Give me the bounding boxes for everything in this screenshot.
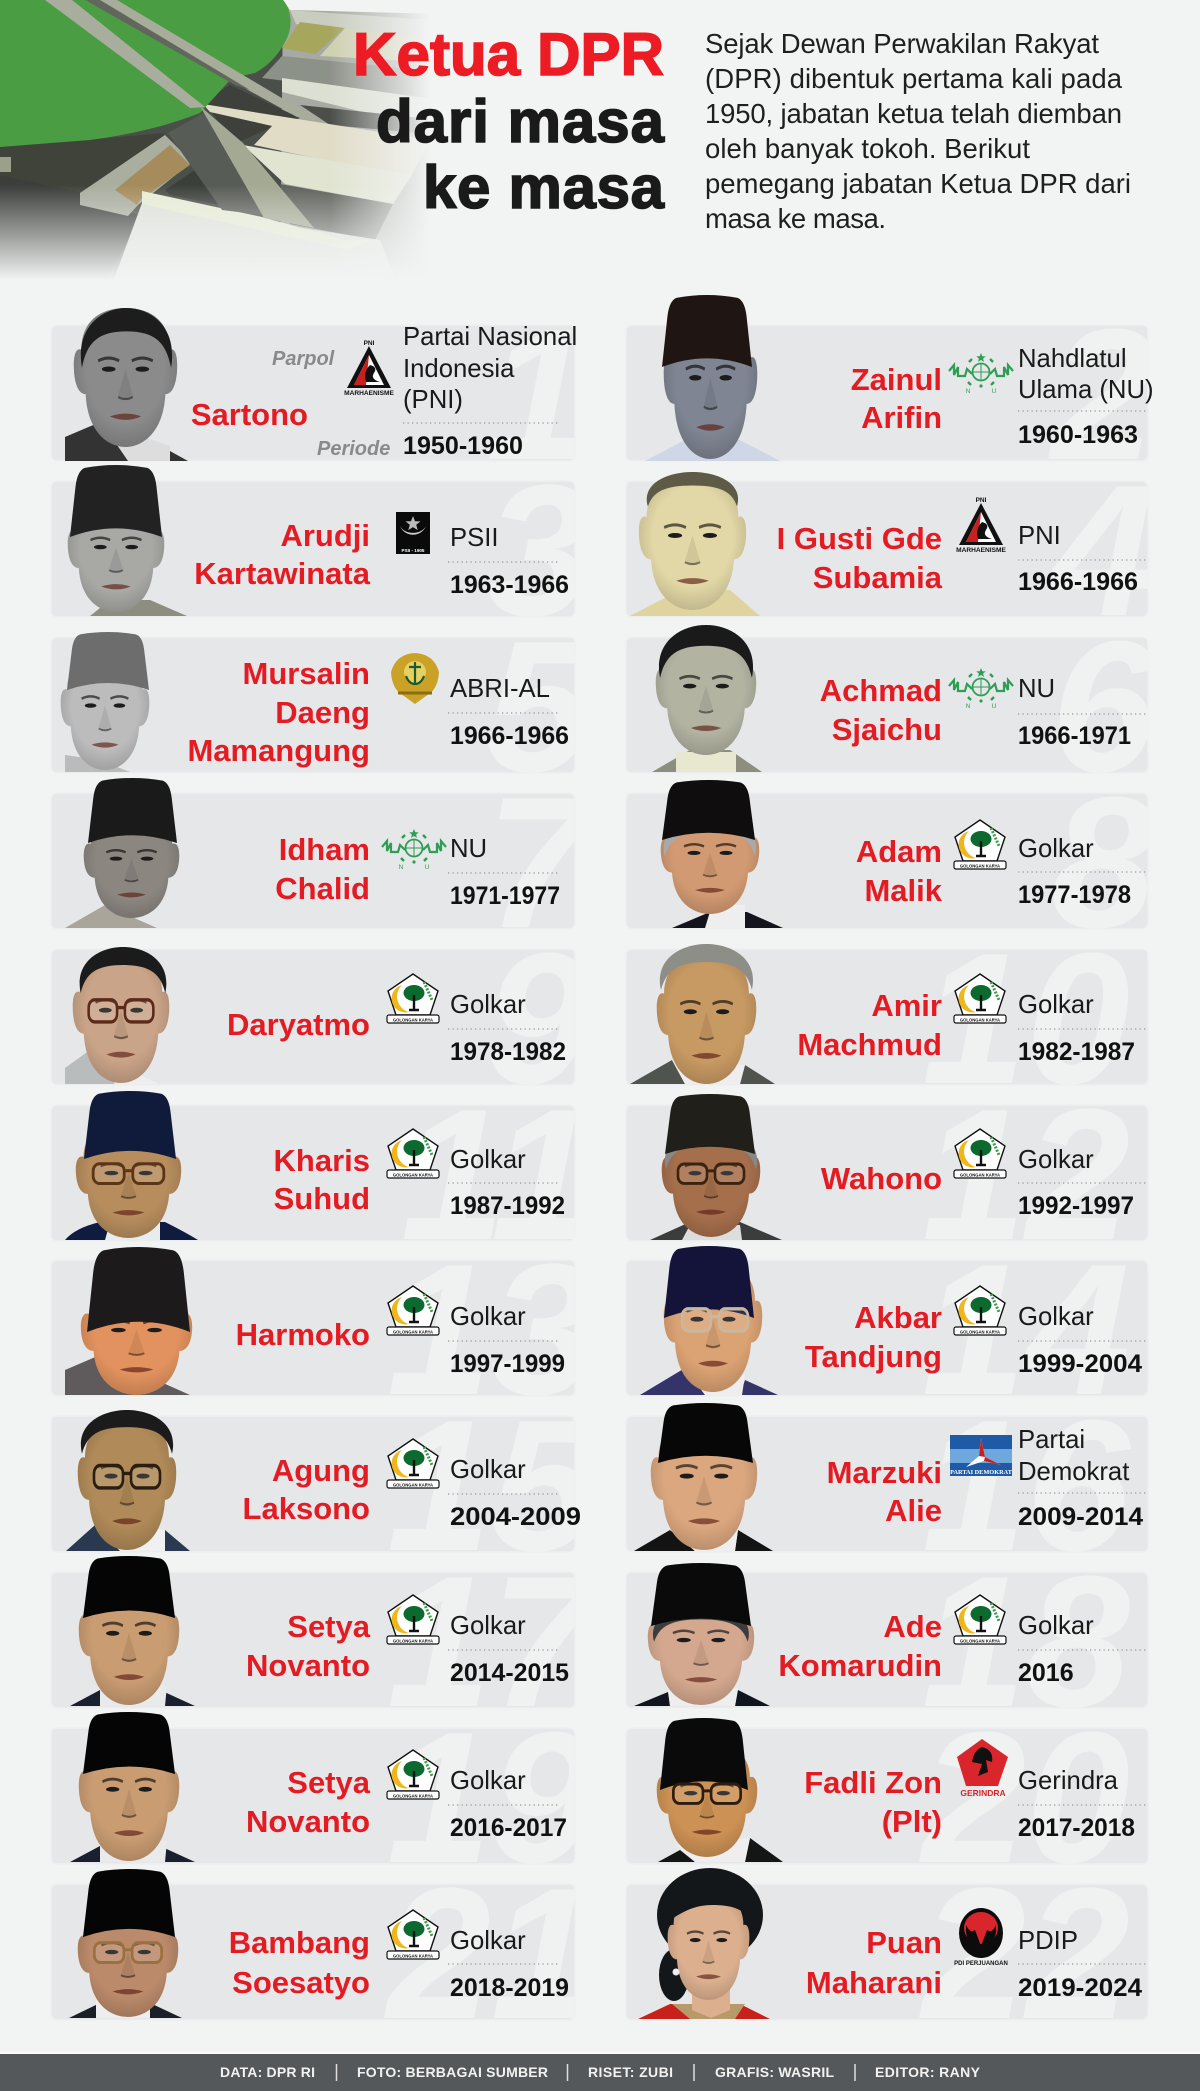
name: Arudji Kartawinata: Kartawinata: [194, 556, 371, 591]
party: Partai Nasional Indonesia: Partai Nasional: [403, 323, 577, 351]
party: Golkar: Golkar: [450, 991, 526, 1019]
party: Gerindra: Gerindra: [1018, 1767, 1119, 1795]
panel: 14 Akbar Tandjung: [626, 1225, 1148, 1434]
footer credits bar: DATA: DPR RI: [220, 2064, 315, 2080]
name: Amir Machmud: [797, 988, 942, 1062]
panel: 21 Bambang Soesatyo: [51, 1849, 595, 2058]
logo: Golkar: [954, 1129, 1006, 1178]
name: Agung Laksono: [243, 1453, 370, 1526]
panel: 11 Kharis Suhud: 11: [401, 1070, 595, 1279]
panel: 13 Harmoko: [51, 1225, 595, 1434]
name: Puan Maharani: Maharani: [806, 1965, 942, 2000]
panel: 14 Akbar Tandjung: 14: [922, 1225, 1130, 1434]
name: Agung Laksono: Laksono: [243, 1491, 370, 1526]
party: Golkar: Golkar: [450, 1767, 526, 1795]
portrait: Setya Novanto: [70, 1712, 195, 1862]
party: Golkar: Golkar: [450, 1612, 526, 1640]
period: 1977-1978: [1018, 881, 1131, 909]
panel: 6 Achmad Sjaichu: 6: [1051, 602, 1156, 811]
logo: Golkar: [954, 974, 1006, 1023]
name: Bambang Soesatyo: Soesatyo: [232, 1965, 370, 2000]
party: NU: NU: [450, 835, 487, 863]
name: Setya Novanto: Novanto: [246, 1648, 370, 1683]
period: 1966-1966: [1018, 568, 1138, 596]
name: Fadli Zon (Plt): Fadli Zon: [804, 1765, 942, 1800]
panel: 18 Ade Komarudin: 18: [922, 1537, 1130, 1746]
panel: 5 Mursalin Daeng Mamangung: [51, 602, 593, 811]
name: Amir Machmud: Amir: [871, 988, 942, 1023]
logo: Golkar: [387, 974, 439, 1023]
party: Partai Demokrat: [1018, 1426, 1129, 1486]
name: Zainul Arifin: Zainul: [851, 362, 942, 397]
panel: 9 Daryatmo: [51, 914, 590, 1123]
party: Partai Nasional Indonesia: [403, 323, 577, 414]
label: Periode: Periode: [317, 438, 390, 460]
title: [353, 21, 665, 221]
logo: PDIP: [954, 1908, 1008, 1967]
logo: Golkar: [954, 1595, 1006, 1644]
panel: 1 Sartono: 1: [486, 290, 590, 499]
logo: Golkar: [387, 1129, 439, 1178]
period: 2016-2017: [450, 1814, 567, 1842]
name: Puan Maharani: Puan: [866, 1925, 942, 1960]
name: Idham Chalid: Idham: [279, 832, 370, 867]
panel: 3 Arudji Kartawinata: [51, 446, 590, 655]
portrait: Setya Novanto: [70, 1556, 195, 1706]
portrait: Mursalin Daeng Mamangung: [61, 632, 149, 772]
panel: 12 Wahono: 12: [922, 1070, 1130, 1279]
panel: 20 Fadli Zon: 20: [919, 1693, 1130, 1902]
party: Nahdlatul Ulama: Nahdlatul: [1018, 345, 1127, 373]
portrait: Daryatmo: [65, 947, 169, 1084]
period: 1950-1960: [403, 432, 523, 460]
name: Kharis Suhud: [274, 1143, 370, 1216]
logo: Demokrat: [950, 1435, 1013, 1476]
footer credits bar: RISET: ZUBI: [588, 2064, 673, 2080]
name: Achmad Sjaichu: [820, 673, 942, 747]
name: Marzuki Alie: [827, 1455, 942, 1528]
panel: 17 Setya Novanto: [51, 1537, 603, 1746]
period: 1966-1966: [450, 722, 569, 750]
name: Ade Komarudin: Ade: [883, 1609, 942, 1644]
name: Idham Chalid: Chalid: [275, 871, 370, 906]
name: Daryatmo: Daryatmo: [227, 1007, 370, 1042]
portrait: Puan Maharani: [638, 1868, 770, 2019]
panel: 21 Bambang Soesatyo: 21: [384, 1849, 595, 2058]
party: Partai Nasional Indonesia: (PNI): [403, 386, 463, 414]
period: 2004-2009: [450, 1503, 581, 1531]
portrait: Amir Machmud: [630, 944, 775, 1084]
period: 2014-2015: [450, 1659, 569, 1687]
portrait: Fadli Zon: [657, 1718, 783, 1862]
name: Setya Novanto: Setya: [287, 1609, 371, 1644]
panel: 9 Daryatmo: 9: [486, 914, 590, 1123]
portrait: Adam Malik: [661, 780, 783, 928]
name: Puan Maharani: [806, 1925, 942, 2000]
period: 1971-1977: [450, 882, 560, 910]
portrait: Marzuki Alie: [634, 1403, 773, 1551]
name: Fadli Zon (Plt): [804, 1765, 942, 1839]
panel: 19 Setya Novanto: 19: [387, 1693, 595, 1902]
party: Golkar: Golkar: [1018, 991, 1094, 1019]
footer credits bar: [0, 2052, 1200, 2091]
panel: 8 Adam Malik: [626, 758, 1155, 967]
name: Arudji Kartawinata: [194, 518, 371, 591]
panel: 4 I Gusti Gde Subamia: 4: [1047, 446, 1155, 655]
name: Wahono: Wahono: [821, 1161, 942, 1196]
panel: 15 Agung Laksono: [51, 1381, 598, 1590]
portrait: Agung Laksono: [66, 1410, 190, 1551]
party: Partai Demokrat: Demokrat: [1018, 1458, 1129, 1486]
name: Agung Laksono: Agung: [272, 1453, 370, 1488]
panel: 11 Kharis Suhud: [51, 1070, 595, 1279]
logo: PDIP: PDI PERJUANGAN: [954, 1961, 1008, 1967]
portrait: Ade Komarudin: [634, 1563, 770, 1706]
party: Nahdlatul Ulama: Ulama (NU): [1018, 376, 1154, 404]
party: Golkar: Golkar: [450, 1927, 526, 1955]
panel: 22 Puan Maharani: [626, 1849, 1148, 2058]
name: Setya Novanto: [246, 1765, 371, 1839]
name: Amir Machmud: Machmud: [797, 1027, 942, 1062]
period: 2016: [1018, 1659, 1074, 1687]
period: 1978-1982: [450, 1038, 566, 1066]
panel: 20 Fadli Zon: [626, 1693, 1148, 1902]
party: Golkar: Golkar: [1018, 1146, 1094, 1174]
panel: 22 Puan Maharani: 22: [919, 1849, 1130, 2058]
name: Kharis Suhud: Suhud: [274, 1181, 370, 1216]
panel: 3 Arudji Kartawinata: 3: [486, 446, 590, 655]
intro text: pemegang jabatan Ketua DPR dari: [705, 168, 1131, 199]
party: Golkar: Golkar: [450, 1303, 526, 1331]
period: 1963-1966: [450, 571, 569, 599]
logo: Golkar: [387, 1439, 439, 1488]
name: Setya Novanto: [246, 1609, 371, 1683]
name: Marzuki Alie: Marzuki: [827, 1455, 942, 1490]
name: Arudji Kartawinata: Arudji: [280, 518, 370, 553]
title: ke masa: [423, 154, 665, 221]
portrait: Sartono: [65, 308, 188, 461]
intro text: oleh banyak tokoh. Berikut: [705, 133, 1030, 164]
logo: PNI: [344, 340, 395, 397]
name: Harmoko: Harmoko: [236, 1317, 370, 1352]
logo: PSII: [396, 512, 430, 554]
logo: Gerindra: GERINDRA: [960, 1788, 1006, 1798]
logo: Golkar: [954, 820, 1006, 869]
name: Bambang Soesatyo: Bambang: [229, 1925, 370, 1960]
name: Marzuki Alie: Alie: [885, 1493, 942, 1528]
intro text: 1950, jabatan ketua telah diemban: [705, 98, 1122, 129]
logo: Golkar: [387, 1286, 439, 1335]
name: Adam Malik: Malik: [864, 873, 943, 908]
party: Partai Nasional Indonesia: Indonesia: [403, 355, 515, 383]
panel: 18 Ade Komarudin: [626, 1537, 1148, 1746]
panel: 16 Marzuki Alie: 16: [922, 1381, 1131, 1590]
title: dari masa: [376, 88, 665, 155]
period: 1966-1971: [1018, 722, 1131, 750]
period: 1987-1992: [450, 1192, 565, 1220]
intro text: Sejak Dewan Perwakilan Rakyat: [705, 28, 1099, 59]
panel: 15 Agung Laksono: 15: [387, 1381, 598, 1590]
period: 2019-2024: [1018, 1974, 1142, 2002]
logo: Demokrat: PARTAI DEMOKRAT: [950, 1469, 1013, 1476]
name: I Gusti Gde Subamia: Subamia: [813, 560, 943, 595]
period: 1992-1997: [1018, 1192, 1134, 1220]
portrait: Arudji Kartawinata: [68, 465, 187, 616]
panel: 19 Setya Novanto: [51, 1693, 595, 1902]
period: 1997-1999: [450, 1350, 565, 1378]
party: Golkar: Golkar: [450, 1146, 526, 1174]
logo: Golkar: [954, 1286, 1006, 1335]
name: Achmad Sjaichu: Sjaichu: [832, 712, 942, 747]
name: Sartono: Sartono: [191, 397, 308, 432]
logo: Golkar: [387, 1595, 439, 1644]
name: Kharis Suhud: Kharis: [274, 1143, 370, 1178]
logo: Golkar: [387, 1750, 439, 1799]
name: Zainul Arifin: [851, 362, 942, 435]
portrait: I Gusti Gde Subamia: [630, 472, 760, 616]
intro text: [705, 28, 1131, 234]
intro text: masa ke masa.: [705, 203, 886, 234]
name: Fadli Zon (Plt): (Plt): [882, 1804, 942, 1839]
panel: 2 Zainul Arifin: 2: [1048, 290, 1155, 499]
name: Akbar Tandjung: Tandjung: [805, 1339, 942, 1374]
party: PSII: PSII: [450, 524, 499, 552]
panel: 4 I Gusti Gde Subamia: [626, 446, 1155, 655]
portrait: Achmad Sjaichu: [652, 625, 762, 772]
panel: 10 Amir Machmud: 10: [922, 914, 1130, 1123]
name: Ade Komarudin: [778, 1609, 942, 1683]
logo: ABRI-AL: [391, 653, 439, 704]
name: Setya Novanto: Novanto: [246, 1804, 370, 1839]
party: Partai Demokrat: Partai: [1018, 1426, 1085, 1454]
name: Achmad Sjaichu: Achmad: [820, 673, 942, 708]
panel: 17 Setya Novanto: 17: [387, 1537, 603, 1746]
panel: 2 Zainul Arifin: [626, 290, 1155, 499]
footer credits bar: GRAFIS: WASRIL: [715, 2064, 834, 2080]
name: Akbar Tandjung: Akbar: [854, 1300, 942, 1335]
title: Ketua DPR: [353, 21, 664, 88]
name: I Gusti Gde Subamia: I Gusti Gde: [777, 521, 942, 556]
period: 1982-1987: [1018, 1038, 1135, 1066]
panel: 12 Wahono: [626, 1070, 1148, 1279]
name: Mursalin Daeng Mamangung: Mamangung: [187, 733, 370, 768]
name: Mursalin Daeng Mamangung: Mursalin: [243, 656, 370, 691]
logo: NU: [949, 353, 1013, 395]
period: 1960-1963: [1018, 421, 1138, 449]
logo: Golkar: [387, 1910, 439, 1959]
name: Mursalin Daeng Mamangung: Daeng: [275, 695, 370, 730]
footer credits bar: EDITOR: RANY: [875, 2064, 981, 2080]
logo: PSII: PSII - 1905: [402, 548, 425, 553]
party: NU: NU: [1018, 675, 1055, 703]
panel: 16 Marzuki Alie: [626, 1381, 1148, 1590]
period: 2009-2014: [1018, 1503, 1143, 1531]
portrait: Bambang Soesatyo: [69, 1869, 182, 2018]
portrait: Zainul Arifin: [645, 295, 780, 461]
party: ABRI-AL: ABRI-AL: [450, 675, 550, 703]
panel: 7 Idham Chalid: [51, 758, 598, 967]
panel: 13 Harmoko: 13: [387, 1225, 595, 1434]
logo: PNI: [956, 497, 1007, 554]
portrait: Harmoko: [65, 1247, 192, 1395]
panel: 1 Sartono: [51, 290, 590, 499]
panel: 8 Adam Malik: 8: [1051, 758, 1155, 967]
intro text: (DPR) dibentuk pertama kali pada: [705, 63, 1123, 94]
panel: 10 Amir Machmud: [626, 914, 1148, 1123]
party: Golkar: Golkar: [1018, 835, 1094, 863]
period: 1999-2004: [1018, 1350, 1142, 1378]
illustration: DPR building roof with green dome: [0, 0, 450, 292]
party: PDIP: PDIP: [1018, 1927, 1078, 1955]
party: Nahdlatul Ulama: [1018, 345, 1154, 404]
name: Idham Chalid: [275, 832, 370, 906]
name: Ade Komarudin: Komarudin: [778, 1648, 942, 1683]
name: I Gusti Gde Subamia: [777, 521, 943, 595]
name: Akbar Tandjung: [805, 1300, 942, 1374]
period: 2018-2019: [450, 1974, 569, 2002]
portrait: Wahono: [650, 1094, 782, 1240]
logo: Gerindra: [957, 1739, 1008, 1798]
name: Mursalin Daeng Mamangung: [187, 656, 370, 768]
name: Adam Malik: [856, 834, 943, 908]
label: Parpol: Parpol: [272, 348, 335, 370]
party: Golkar: Golkar: [1018, 1303, 1094, 1331]
logo: NU: [949, 668, 1013, 710]
name: Setya Novanto: Setya: [287, 1765, 371, 1800]
name: Bambang Soesatyo: [229, 1925, 370, 2000]
name: Adam Malik: Adam: [856, 834, 942, 869]
party: Golkar: Golkar: [450, 1456, 526, 1484]
panel: 6 Achmad Sjaichu: [626, 602, 1156, 811]
period: 2017-2018: [1018, 1814, 1135, 1842]
party: Golkar: Golkar: [1018, 1612, 1094, 1640]
footer credits bar: FOTO: BERBAGAI SUMBER: [357, 2064, 548, 2080]
party: PNI: PNI: [1018, 522, 1061, 550]
portrait: Idham Chalid: [65, 778, 179, 928]
name: Zainul Arifin: Arifin: [861, 400, 942, 435]
panel: 7 Idham Chalid: 7: [486, 758, 598, 967]
panel: 5 Mursalin Daeng Mamangung: 5: [486, 602, 593, 811]
logo: NU: [382, 829, 446, 871]
portrait: Akbar Tandjung: [640, 1246, 778, 1395]
portrait: Kharis Suhud: [65, 1091, 198, 1240]
